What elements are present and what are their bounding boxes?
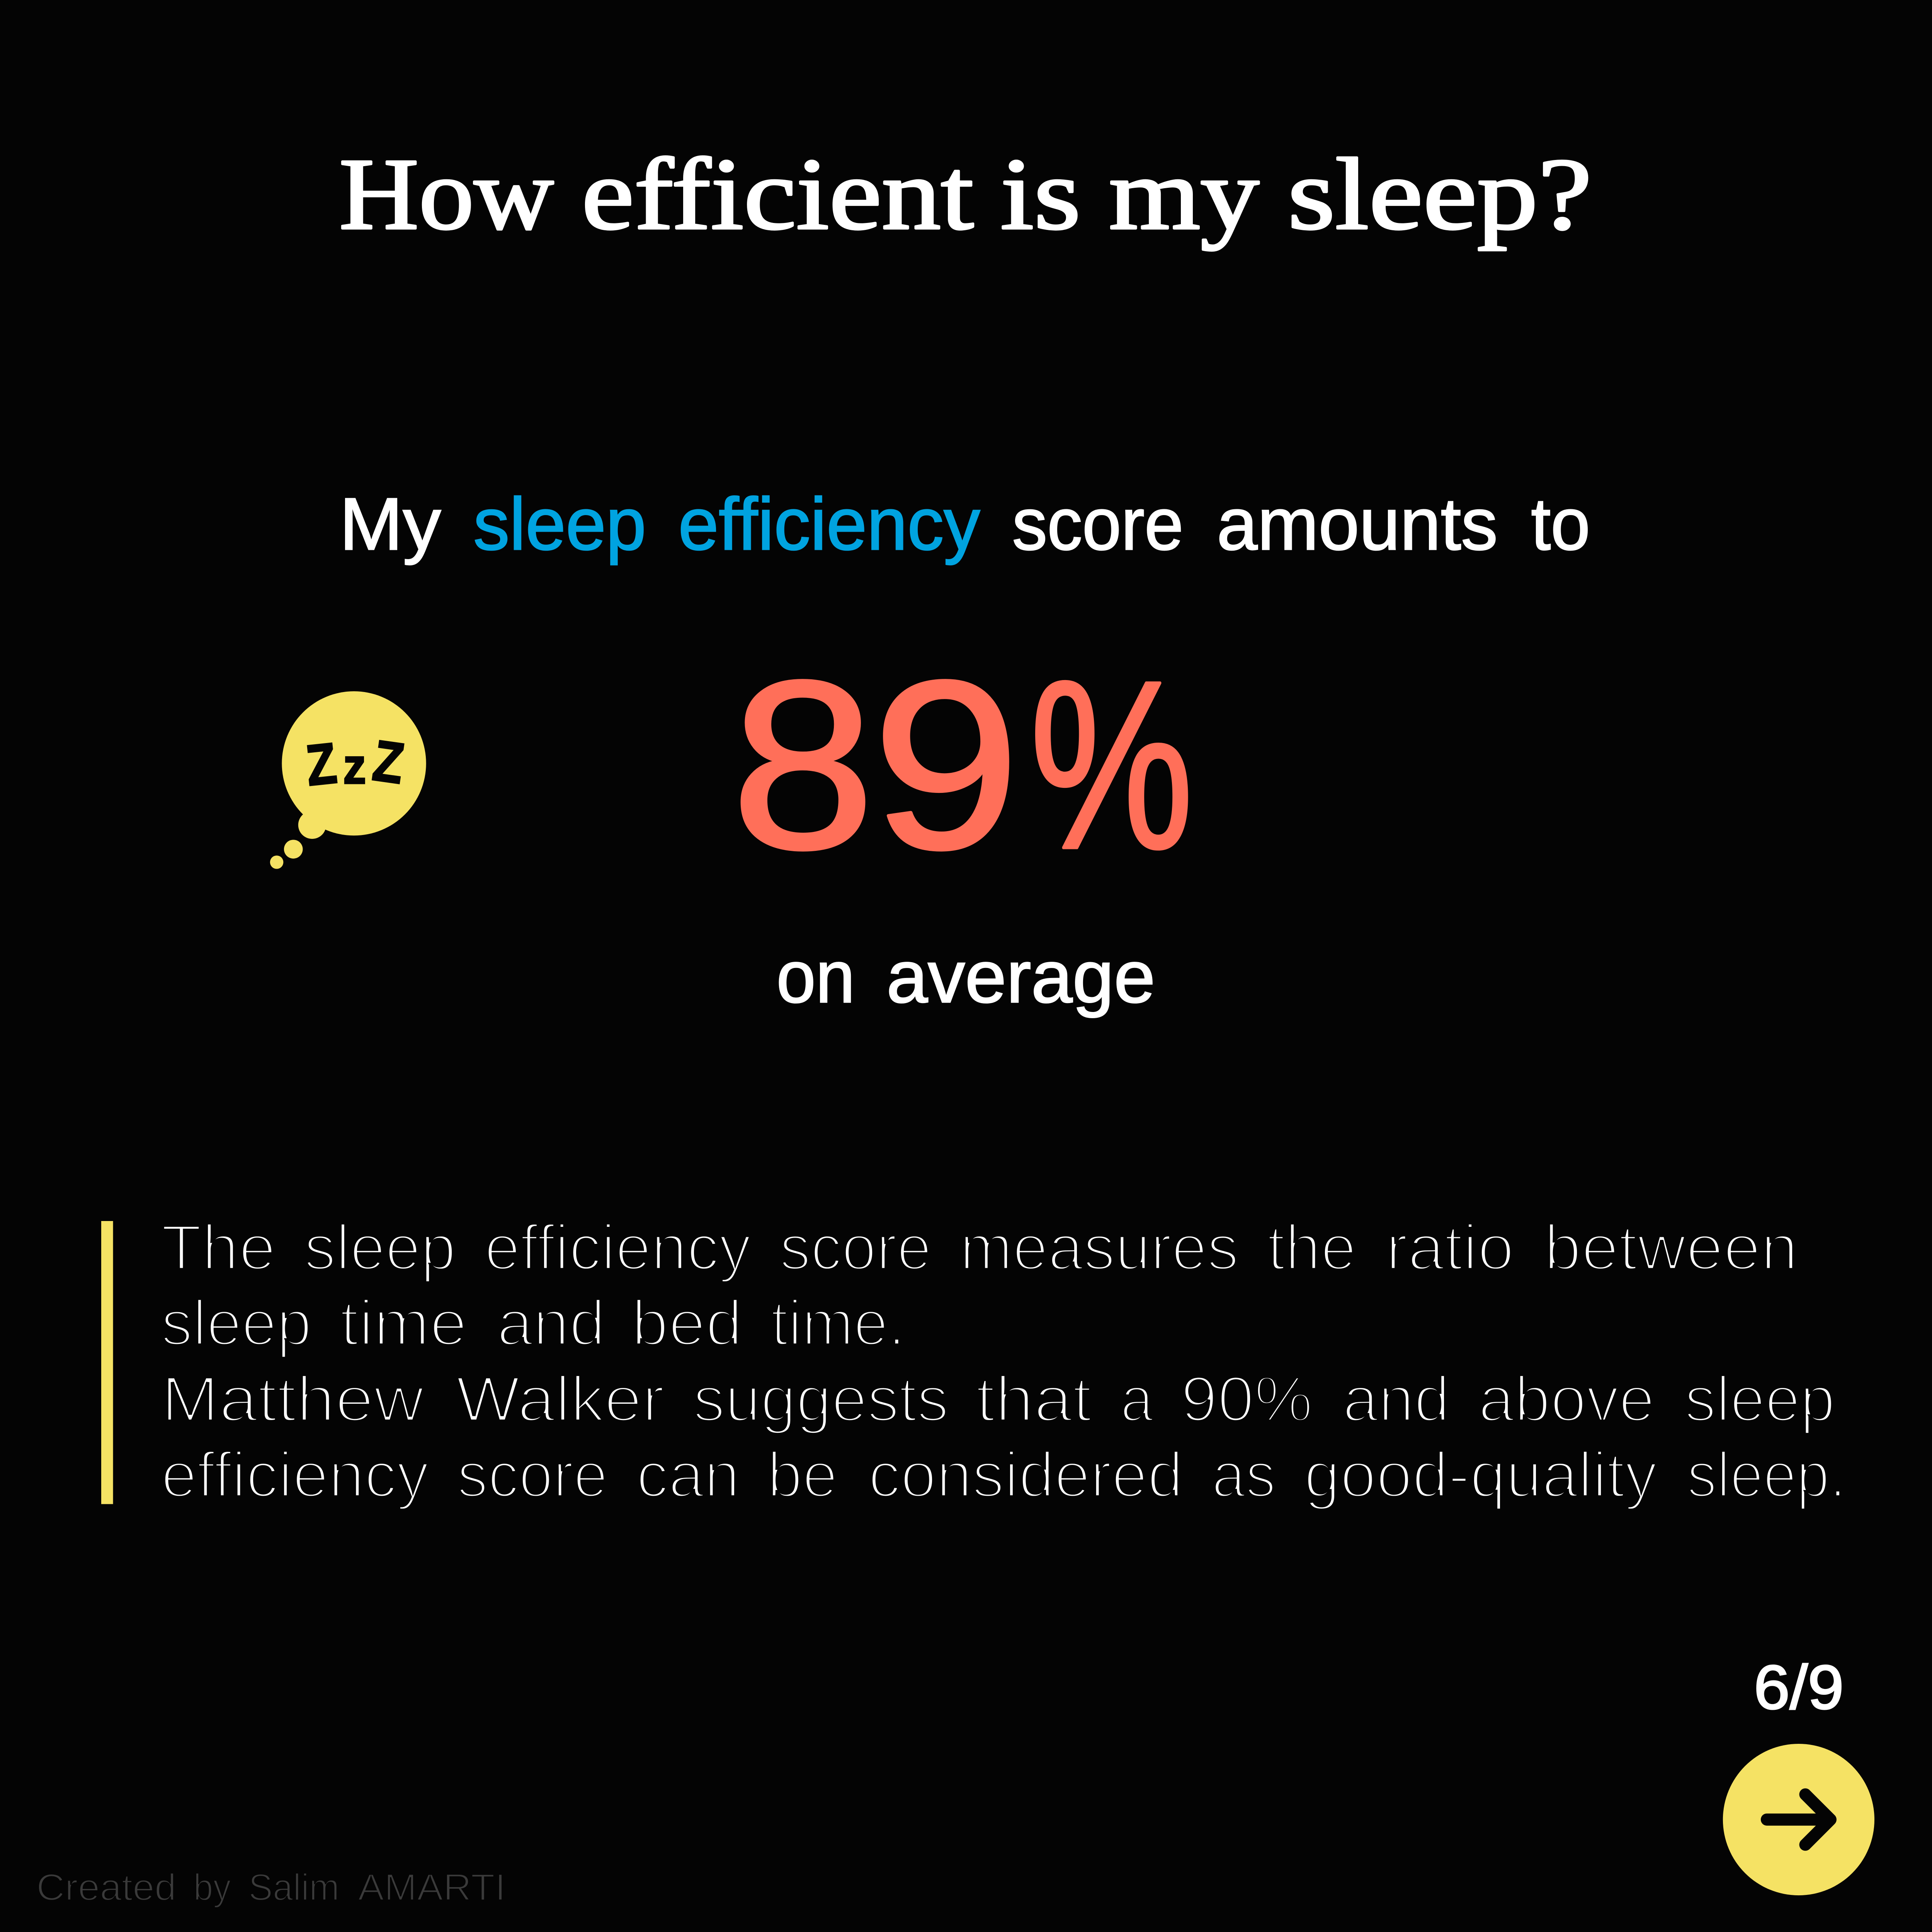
text block: explanation: score xyxy=(780,1212,932,1283)
text block: explanation: can xyxy=(636,1439,740,1511)
credit: Salim xyxy=(248,1866,339,1908)
text block: explanation: the xyxy=(1267,1212,1356,1283)
text block: explanation: sleep. xyxy=(1687,1439,1846,1511)
text block: explanation: 90% xyxy=(1181,1363,1313,1435)
heading: sleep efficiency intro line: efficiency xyxy=(678,483,980,565)
heading: sleep efficiency intro line: sleep xyxy=(473,483,646,565)
big number: 89 percent xyxy=(731,631,1194,899)
text block: explanation: efficiency xyxy=(161,1439,429,1511)
text block: explanation: that xyxy=(976,1363,1092,1435)
text block: explanation: sleep xyxy=(304,1212,456,1283)
quote bar xyxy=(101,1221,113,1504)
credit: by xyxy=(193,1866,231,1908)
text block: explanation: a xyxy=(1120,1363,1153,1435)
icon: sleeping thought bubble: Z xyxy=(369,728,408,796)
text block: explanation: sleep xyxy=(1685,1363,1835,1435)
heading: sleep efficiency intro line xyxy=(339,483,1590,565)
text block: explanation: ratio xyxy=(1386,1212,1514,1283)
text block: explanation xyxy=(161,1212,1846,1511)
text block: explanation: as xyxy=(1212,1439,1276,1511)
text block: explanation: Matthew xyxy=(161,1363,424,1435)
text block: explanation: suggests xyxy=(693,1363,949,1435)
text block: explanation: The xyxy=(161,1212,276,1283)
title: efficient xyxy=(582,138,974,251)
text: on average: on xyxy=(776,935,855,1018)
text block: explanation: between xyxy=(1544,1212,1798,1283)
credit: Created xyxy=(36,1866,176,1908)
heading: sleep efficiency intro line: amounts xyxy=(1217,483,1498,565)
icon: sleeping thought bubble: z xyxy=(343,738,366,794)
title: sleep? xyxy=(1288,138,1592,251)
text block: explanation: efficiency xyxy=(485,1212,751,1283)
text block: explanation: score xyxy=(457,1439,608,1511)
heading: sleep efficiency intro line: My xyxy=(339,483,441,565)
big number: 89 percent: % xyxy=(1030,631,1194,899)
heading: sleep efficiency intro line: to xyxy=(1531,483,1590,565)
text block: explanation: good-quality xyxy=(1304,1439,1657,1511)
text block: explanation: time xyxy=(340,1287,467,1359)
text block: explanation: sleep xyxy=(161,1287,312,1359)
credit xyxy=(36,1866,506,1908)
icon: sleeping thought bubble: Z xyxy=(303,731,340,798)
text block: explanation: above xyxy=(1478,1363,1655,1435)
text block: explanation: considered xyxy=(868,1439,1183,1511)
text block: explanation: and xyxy=(1343,1363,1450,1435)
title xyxy=(339,138,1592,251)
big number: 89 percent: 8 xyxy=(731,631,875,899)
text block: explanation: measures xyxy=(960,1212,1239,1283)
icon: sleeping thought bubble xyxy=(270,691,426,869)
text block: explanation: bed xyxy=(631,1287,743,1359)
heading: sleep efficiency intro line: score xyxy=(1012,483,1184,565)
title: is xyxy=(1000,138,1081,251)
text block: explanation: time. xyxy=(771,1287,905,1359)
big number: 89 percent: 9 xyxy=(872,631,1020,899)
text block: explanation: Walker xyxy=(456,1363,665,1435)
credit: AMARTI xyxy=(358,1866,506,1908)
text block: explanation: and xyxy=(497,1287,605,1359)
title: How xyxy=(339,138,554,251)
text: on average: average xyxy=(886,935,1155,1018)
page number: 6/9 xyxy=(1754,1653,1844,1722)
icon: next arrow button xyxy=(1723,1744,1874,1895)
title: my xyxy=(1109,138,1259,251)
text block: explanation: be xyxy=(767,1439,838,1511)
